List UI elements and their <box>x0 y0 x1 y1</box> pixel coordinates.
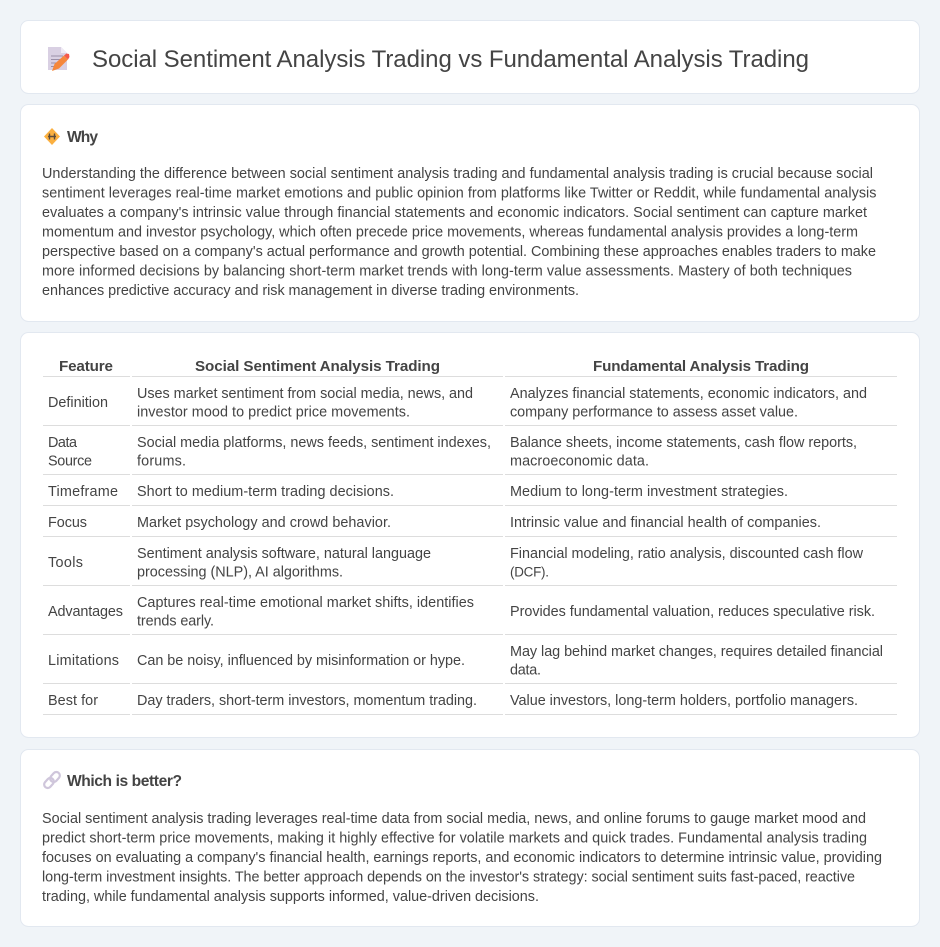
panel: comparison table <box>20 332 920 738</box>
panel: title header <box>20 20 920 94</box>
text block: which is better paragraph: long-term investment insights. The better approach depends on the investor's strategy: social sentiment suits fast-paced, reactive <box>42 870 855 886</box>
table row: tools: Tools <box>48 555 83 571</box>
table row: advantages: Captures real-time emotional market shifts, identifies <box>137 595 474 611</box>
table row: data source: Social media platforms, news feeds, sentiment indexes, <box>137 435 491 451</box>
text block: why paragraph: sentiment leverages real-time market emotions and public opinion from platforms like Twitter or Reddit, while fundamental analysis <box>42 186 876 202</box>
table row: advantages: Provides fundamental valuation, reduces speculative risk. <box>510 604 875 620</box>
text block: why paragraph: perspective based on a company's actual performance and growth potential. Combining these approaches enables traders to make <box>42 244 876 260</box>
table header row: Feature <box>59 358 113 375</box>
table row: best for: Best for <box>48 693 98 709</box>
table row: definition: investor mood to predict price movements. <box>137 404 410 420</box>
table row: data source: Source <box>48 454 92 470</box>
table row: timeframe: Timeframe <box>48 484 118 500</box>
table header row: Fundamental Analysis Trading <box>593 358 809 375</box>
table row: tools: Sentiment analysis software, natural language <box>137 546 431 562</box>
table row: advantages: trends early. <box>137 614 214 630</box>
text block: why paragraph <box>42 166 876 299</box>
table row: tools: processing (NLP), AI algorithms. <box>137 564 343 580</box>
heading: which is better: Which is better? <box>67 773 182 790</box>
table row: definition: Uses market sentiment from social media, news, and <box>137 386 473 402</box>
text block: why paragraph: Understanding the difference between social sentiment analysis trading and fundamental analysis trading is crucial because social <box>42 166 873 182</box>
table row: definition <box>43 386 897 426</box>
table row: limitations <box>43 644 897 684</box>
table row: limitations: data. <box>510 662 541 678</box>
panel: which is better <box>20 750 920 926</box>
table row: data source: macroeconomic data. <box>510 454 649 470</box>
table row: definition: company performance to assess asset value. <box>510 404 798 420</box>
table row: data source: forums. <box>137 454 186 470</box>
text block: which is better paragraph: Social sentiment analysis trading leverages real-time data from social media, news, and online forums to gauge market mood and <box>42 811 866 827</box>
title: Social Sentiment Analysis Trading vs Fundamental Analysis Trading <box>92 46 809 73</box>
table row: best for: Value investors, long-term holders, portfolio managers. <box>510 693 858 709</box>
table row: best for: Day traders, short-term investors, momentum trading. <box>137 693 477 709</box>
text block: which is better paragraph: predict short-term price movements, making it highly effective for volatile markets and quick trades. Fundamental analysis trading <box>42 830 867 846</box>
table row: best for <box>43 693 897 715</box>
table row: tools: (DCF). <box>510 564 549 580</box>
table row: data source: Data <box>48 435 77 451</box>
table row: limitations: Can be noisy, influenced by misinformation or hype. <box>137 653 465 669</box>
text block: why paragraph: more informed decisions by balancing short-term market trends with long-term value assessments. Mastery of both techniques <box>42 264 852 280</box>
icon: orange diamond sign <box>44 128 60 145</box>
table row: data source: Balance sheets, income statements, cash flow reports, <box>510 435 857 451</box>
table row: definition: Analyzes financial statements, economic indicators, and <box>510 386 867 402</box>
table row: focus: Market psychology and crowd behavior. <box>137 515 391 531</box>
table row: focus <box>43 515 897 537</box>
text block: why paragraph: enhances predictive accuracy and risk management in diverse trading environments. <box>42 283 579 299</box>
icon: document with pencil <box>48 47 70 71</box>
table row: timeframe <box>43 484 897 506</box>
text block: which is better paragraph: focuses on evaluating a company's financial health, earnings reports, and economic indicators to determine intrinsic value, providing <box>42 850 882 866</box>
panel: why <box>20 104 920 322</box>
icon: chain link <box>43 771 61 789</box>
table header row: Social Sentiment Analysis Trading <box>195 358 440 375</box>
table row: timeframe: Medium to long-term investment strategies. <box>510 484 788 500</box>
text block: which is better paragraph: trading, while fundamental analysis supports informed, value-driven decisions. <box>42 889 539 905</box>
table header row <box>43 358 897 377</box>
table row: tools: Financial modeling, ratio analysis, discounted cash flow <box>510 546 864 562</box>
text block: why paragraph: momentum and investor psychology, which often precede price movements, whereas fundamental analysis provides a long-term <box>42 224 858 240</box>
table row: focus: Focus <box>48 515 87 531</box>
text block: why paragraph: evaluates a company's intrinsic value through financial statements and economic indicators. Social sentiment can capture market <box>42 205 867 221</box>
text block: which is better paragraph <box>42 811 882 905</box>
table row: limitations: Limitations <box>48 653 119 669</box>
table row: focus: Intrinsic value and financial health of companies. <box>510 515 821 531</box>
table row: definition: Definition <box>48 395 108 411</box>
table row: limitations: May lag behind market changes, requires detailed financial <box>510 644 883 660</box>
table row: data source <box>43 435 897 475</box>
table row: advantages <box>43 595 897 635</box>
heading: why: Why <box>67 129 98 146</box>
table row: advantages: Advantages <box>48 604 123 620</box>
table row: tools <box>43 546 897 586</box>
table row: timeframe: Short to medium-term trading decisions. <box>137 484 394 500</box>
